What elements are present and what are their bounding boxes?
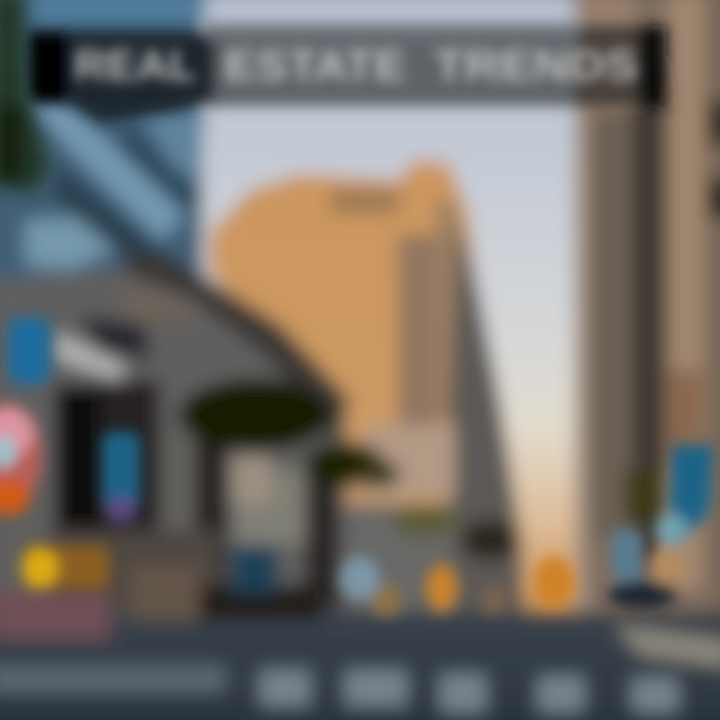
- blue street signs: [8, 318, 714, 609]
- banner title: REAL: [74, 41, 196, 90]
- sidewalk and road: [0, 612, 720, 720]
- shop window: [232, 456, 305, 593]
- green trees in street: [179, 379, 520, 560]
- central golden building: [210, 160, 522, 610]
- left blue glass building: [0, 0, 205, 280]
- banner title: TRENDS: [434, 41, 638, 90]
- left low building and storefronts: [0, 250, 350, 620]
- orange street lights: [340, 556, 574, 616]
- banner across the street: [28, 24, 668, 122]
- banner title: [74, 41, 638, 90]
- palm foliage left edge: [0, 0, 50, 195]
- banner background: [28, 24, 668, 122]
- yellow shop sign: [22, 545, 110, 589]
- round red sign: [0, 403, 42, 515]
- banner title: ESTATE: [224, 41, 406, 90]
- sky: [190, 0, 590, 610]
- right beige tower: [574, 0, 720, 620]
- crosswalk stripes: [0, 666, 678, 716]
